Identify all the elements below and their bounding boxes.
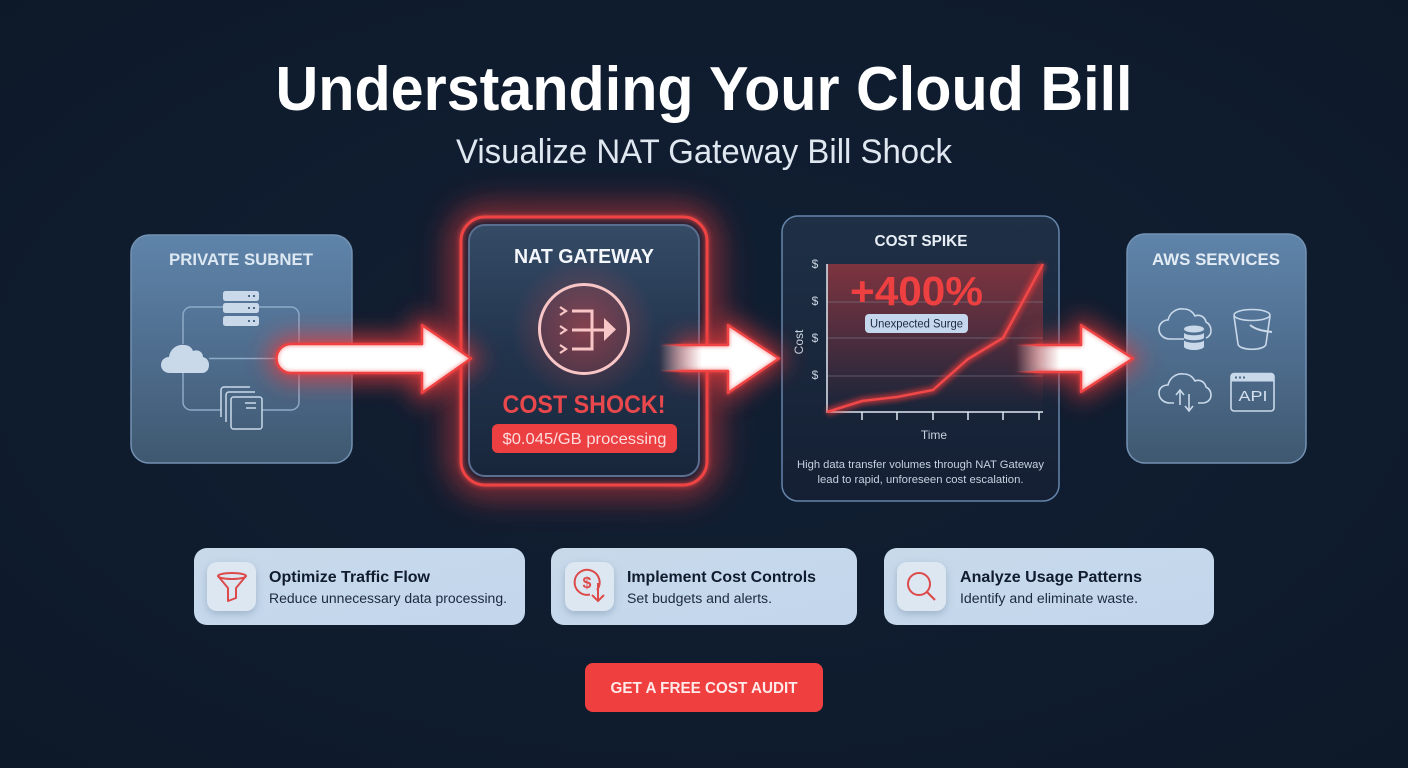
card title: Optimize Traffic Flow <box>269 569 431 586</box>
card description: Reduce unnecessary data processing. <box>269 591 507 606</box>
y axis currency labels: $ <box>812 257 819 271</box>
card description: Set budgets and alerts. <box>627 591 772 606</box>
card: implement cost controls <box>551 548 857 625</box>
card: optimize traffic flow <box>194 548 525 625</box>
y axis currency labels: $ <box>812 331 819 345</box>
icon: cloud transfer <box>1159 374 1211 411</box>
call to action button <box>585 663 823 712</box>
chart description: High data transfer volumes through NAT Gateway <box>797 459 1045 471</box>
icon: cloud <box>161 345 209 373</box>
network connection lines <box>183 307 299 410</box>
icon: API window: API <box>1238 388 1268 405</box>
card description: Identify and eliminate waste. <box>960 591 1138 606</box>
icon: cloud database <box>1159 309 1211 350</box>
card title: Analyze Usage Patterns <box>960 569 1142 586</box>
chart description: lead to rapid, unforeseen cost escalation. <box>818 474 1024 486</box>
icon: NAT gateway routing <box>540 284 628 374</box>
icon: document stack <box>221 387 262 429</box>
icon: magnifier <box>897 562 946 611</box>
icon: storage bucket <box>1234 310 1272 349</box>
arrow: cost spike to AWS services <box>1016 325 1133 392</box>
spike percentage: +400% <box>850 268 983 314</box>
panel: cost spike <box>782 216 1059 501</box>
panel heading: AWS services: AWS SERVICES <box>1152 251 1280 269</box>
panel heading: NAT gateway: NAT GATEWAY <box>514 246 655 268</box>
arrow: NAT gateway to cost spike <box>660 325 779 393</box>
y axis title: Cost <box>792 329 806 354</box>
y axis currency labels: $ <box>812 294 819 308</box>
icon: dollar with down arrow: $ <box>583 575 592 592</box>
title: Understanding Your Cloud Bill <box>276 55 1132 124</box>
panel heading: cost spike: COST SPIKE <box>874 233 968 250</box>
badge: unexpected surge <box>865 314 968 333</box>
subtitle: Visualize NAT Gateway Bill Shock <box>456 133 953 171</box>
line chart <box>792 257 1043 442</box>
card title: Implement Cost Controls <box>627 569 816 586</box>
icon: server stack <box>223 291 259 326</box>
call to action button: GET A FREE COST AUDIT <box>610 680 798 697</box>
cost shock label: COST SHOCK! <box>502 391 666 419</box>
panel: NAT gateway <box>461 217 707 485</box>
icon: funnel <box>207 562 256 611</box>
icon: API window <box>1231 374 1274 411</box>
icon: dollar with down arrow <box>565 562 614 611</box>
panel heading: private subnet: PRIVATE SUBNET <box>169 251 313 269</box>
badge: unexpected surge: Unexpected Surge <box>870 318 963 330</box>
chart description <box>797 459 1045 486</box>
y axis currency labels: $ <box>812 368 819 382</box>
x axis title: Time <box>921 428 947 442</box>
panel: AWS services <box>1127 234 1306 463</box>
y axis currency labels <box>812 257 819 382</box>
card: analyze usage patterns <box>884 548 1214 625</box>
panel: private subnet <box>131 235 352 463</box>
price badge: $0.045/GB processing <box>502 431 666 448</box>
arrow: subnet to NAT gateway <box>276 325 471 393</box>
price badge <box>492 424 677 453</box>
